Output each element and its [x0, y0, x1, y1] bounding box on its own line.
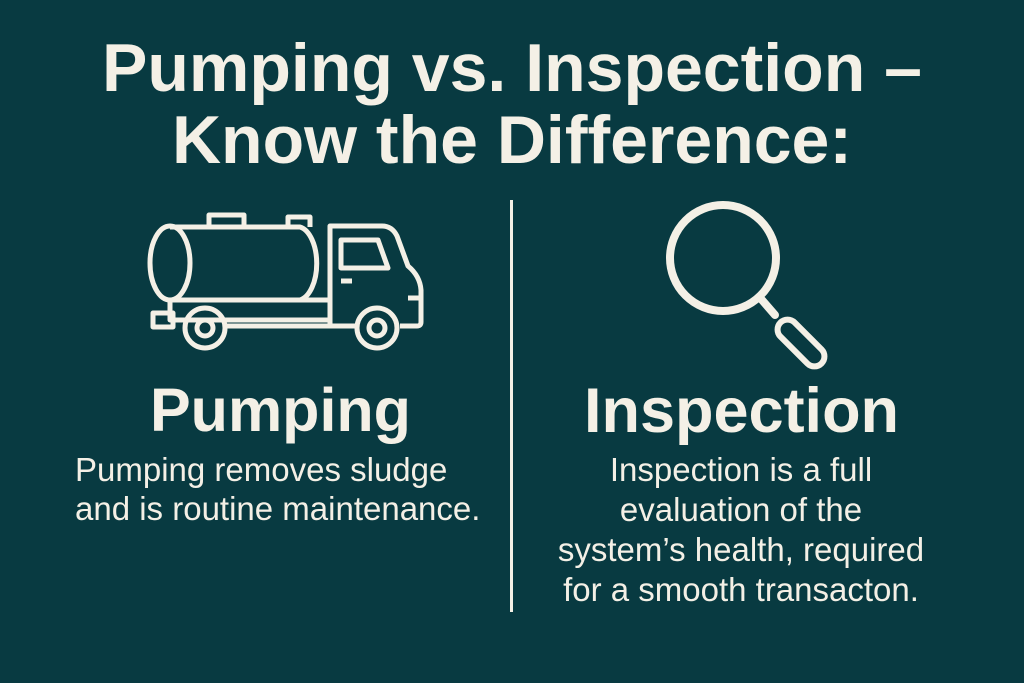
text: inspection: Inspection is a full	[610, 451, 872, 488]
text: inspection: system’s health, required	[558, 531, 924, 568]
text: inspection: evaluation of the	[620, 491, 862, 528]
title	[102, 30, 922, 178]
title: Know the Difference:	[172, 102, 852, 178]
heading: Pumping: Pumping	[150, 376, 411, 444]
text: inspection: for a smooth transacton.	[563, 571, 919, 608]
title: Pumping vs. Inspection –	[102, 30, 922, 106]
text: pumping: and is routine maintenance.	[75, 490, 480, 527]
text: pumping: Pumping removes sludge	[75, 451, 447, 488]
heading: Inspection: Inspection	[584, 376, 899, 446]
divider	[510, 200, 513, 612]
text: inspection	[558, 451, 924, 608]
text: pumping	[75, 451, 480, 527]
